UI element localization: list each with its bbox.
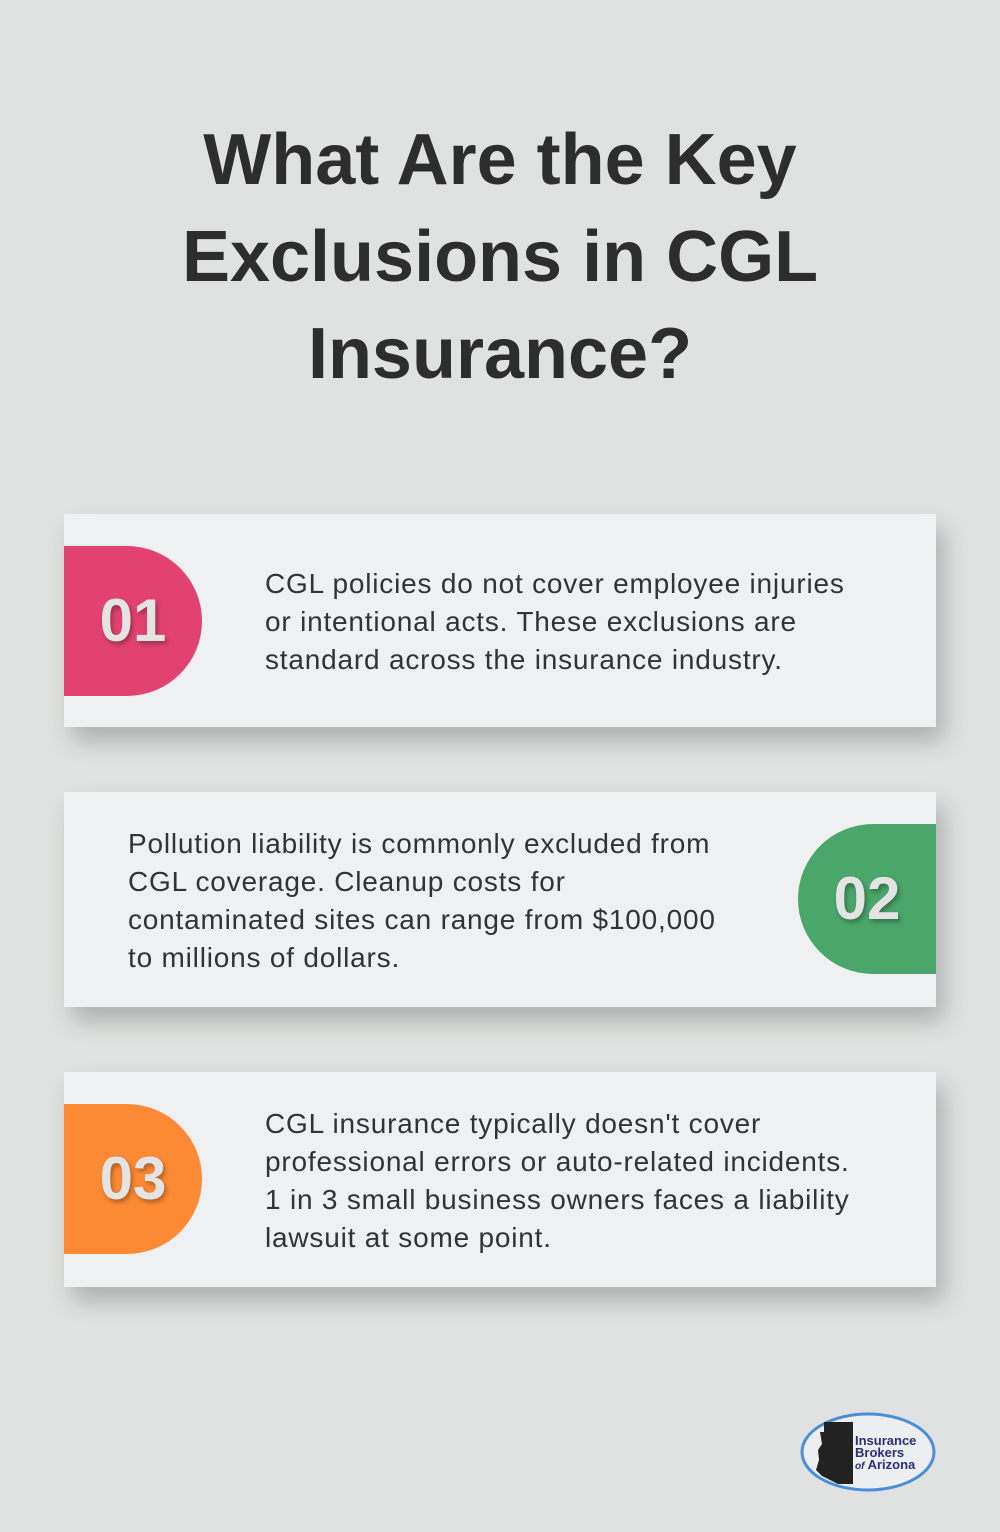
- text 2: [128, 828, 716, 973]
- text 3: CGL insurance typically doesn't cover: [265, 1108, 761, 1139]
- panel: card 1: [64, 514, 936, 727]
- title: Exclusions in CGL: [182, 217, 818, 297]
- badge 03: 03: [100, 1145, 166, 1212]
- panel: card 3: [64, 1072, 936, 1287]
- badge 02: [798, 824, 936, 974]
- text 2: CGL coverage. Cleanup costs for: [128, 866, 566, 897]
- badge 03: [64, 1104, 202, 1254]
- text 1: CGL policies do not cover employee injuries: [265, 568, 845, 599]
- text 3: [265, 1108, 850, 1253]
- title: Insurance?: [308, 314, 692, 394]
- text 3: professional errors or auto-related incidents.: [265, 1146, 850, 1177]
- text 3: lawsuit at some point.: [265, 1222, 552, 1253]
- text 2: to millions of dollars.: [128, 942, 400, 973]
- text 1: standard across the insurance industry.: [265, 644, 783, 675]
- text 1: [265, 568, 845, 675]
- title: [182, 120, 818, 394]
- badge 01: [64, 546, 202, 696]
- text 2: contaminated sites can range from $100,000: [128, 904, 716, 935]
- badge 02: 02: [834, 865, 900, 932]
- logo: of Arizona: [855, 1457, 916, 1472]
- title: What Are the Key: [203, 120, 797, 200]
- text 2: Pollution liability is commonly excluded from: [128, 828, 710, 859]
- text 1: or intentional acts. These exclusions are: [265, 606, 797, 637]
- logo: Insurance: [855, 1433, 916, 1448]
- text 3: 1 in 3 small business owners faces a liability: [265, 1184, 850, 1215]
- logo: Brokers: [855, 1445, 904, 1460]
- badge 01: 01: [100, 587, 166, 654]
- panel: card 2: [64, 792, 936, 1007]
- logo: [800, 1412, 936, 1492]
